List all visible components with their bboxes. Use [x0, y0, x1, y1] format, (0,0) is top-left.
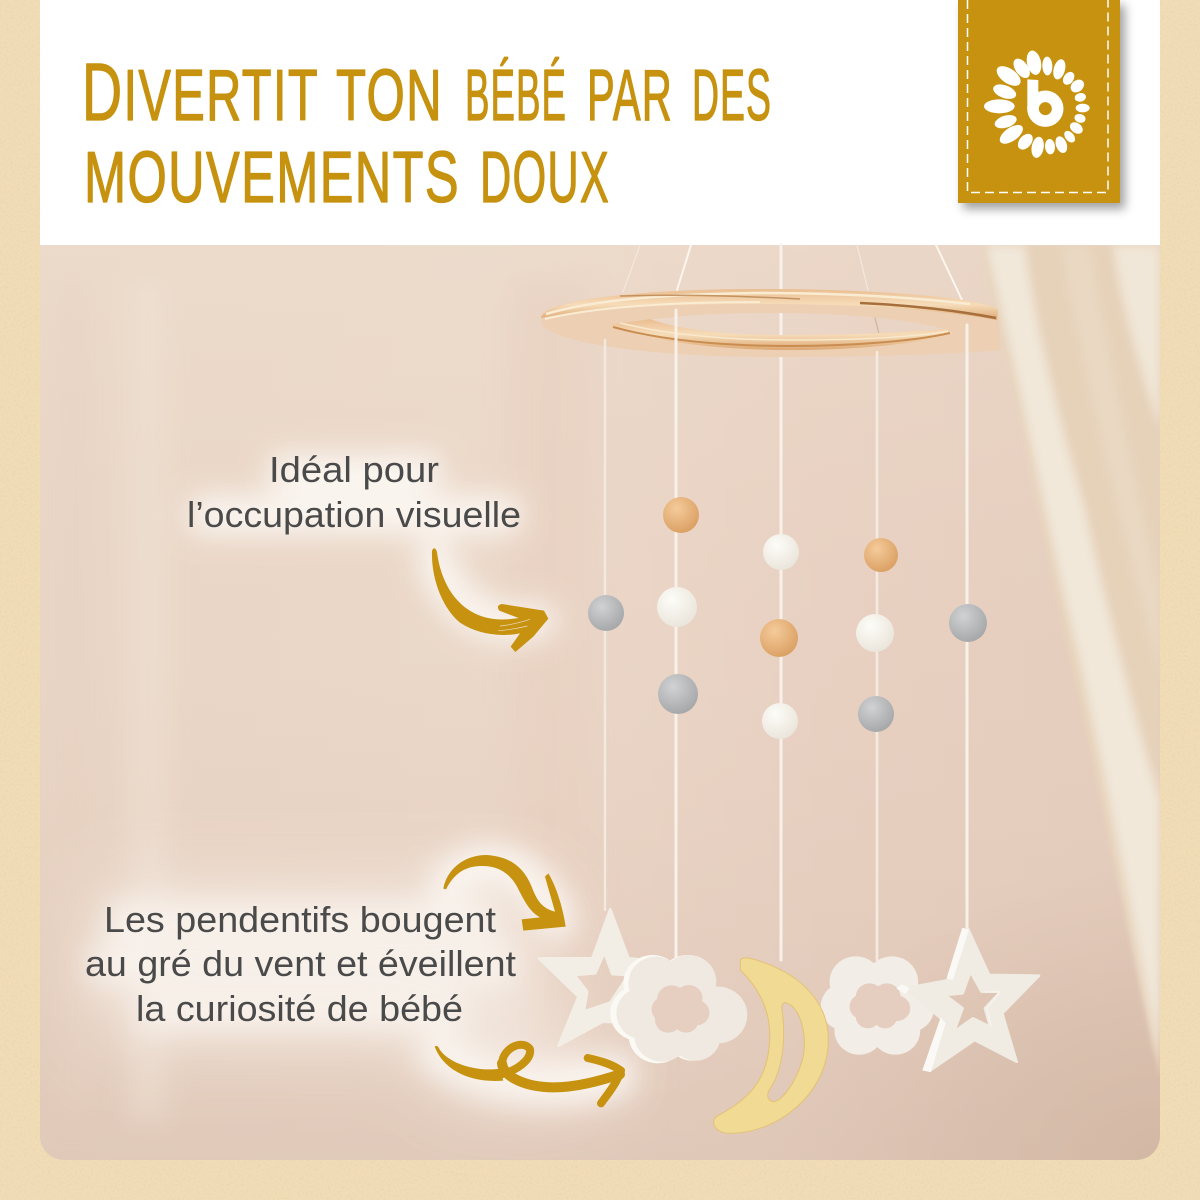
text: pendants: la curiosité de bébé [136, 988, 463, 1029]
icon: left cloud [610, 955, 747, 1063]
text: pendants: au gré du vent et éveillent [85, 943, 516, 984]
curtain [980, 245, 1160, 1077]
hanging strings in front of ring [605, 310, 967, 960]
title: PAR [587, 56, 673, 136]
text: visual occupation [187, 449, 521, 535]
icon: left star [539, 909, 665, 1046]
text: pendants: Les pendentifs bougent [104, 899, 496, 940]
title: BÉBÉ [465, 56, 567, 136]
title [82, 47, 772, 218]
text: visual occupation: l’occupation visuelle [187, 494, 521, 535]
panel: title band [40, 0, 1160, 245]
icon: right cloud [821, 956, 934, 1055]
hanging strings behind ring [623, 245, 962, 960]
arrow: to beads [432, 548, 548, 652]
text: visual occupation: Idéal pour [269, 449, 439, 490]
logo badge [958, 0, 1125, 209]
pendants [539, 909, 1039, 1133]
title: TON [336, 56, 443, 136]
beads [588, 497, 987, 739]
soft outer glow [100, 890, 600, 1090]
panel: photo background [40, 245, 1160, 1160]
arrow: to left star [443, 855, 566, 931]
wooden ring [541, 289, 1001, 357]
title: DIVERTIT [82, 47, 319, 138]
title: DES [692, 56, 772, 136]
icon: sunflower logo [984, 49, 1090, 159]
text glow [90, 455, 615, 1083]
icon: moon [714, 958, 828, 1133]
text: pendants [85, 899, 516, 1029]
icon: right star [897, 928, 1039, 1072]
title: DOUX [480, 138, 610, 218]
arrow: looping to cloud [435, 1045, 621, 1103]
title: MOUVEMENTS [84, 138, 460, 218]
